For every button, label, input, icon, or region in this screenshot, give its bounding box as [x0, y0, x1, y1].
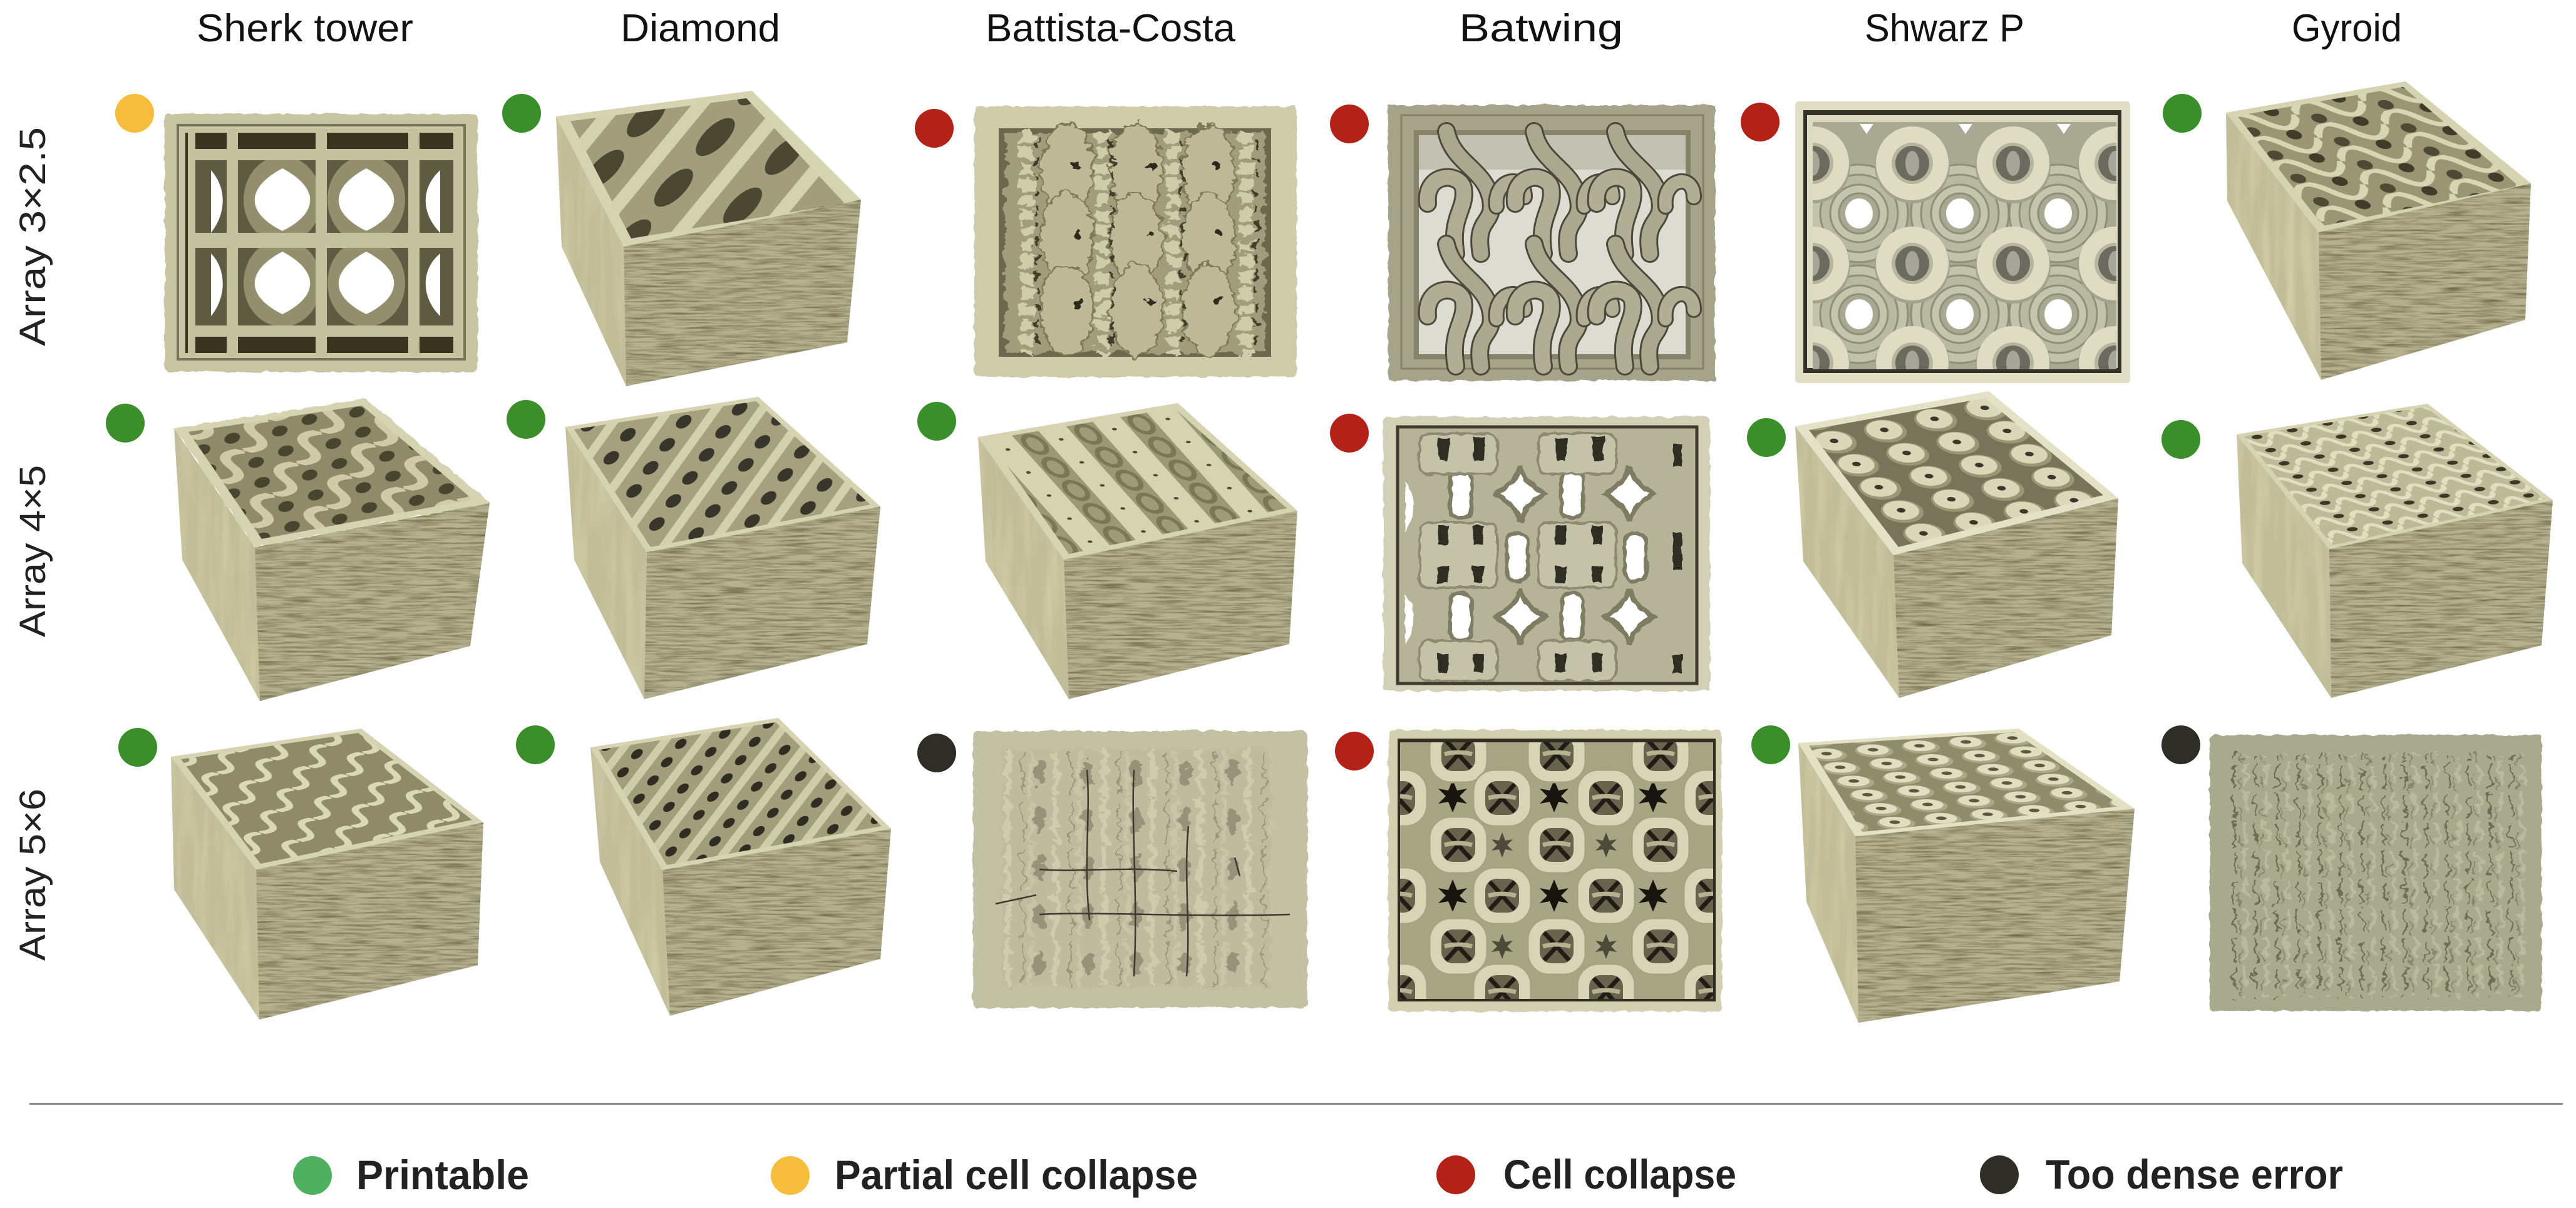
top face [2226, 81, 2531, 232]
sample: Batwing 4×5 [1383, 417, 1710, 691]
sample: Battista-Costa 3×2.5 [974, 106, 1297, 377]
status dot: Sherk tower 3×2.5, partial collapse [115, 94, 154, 133]
status dot: Sherk tower 4×5, printable [106, 404, 145, 443]
sample: Shwarz P 5×6 [1682, 694, 2221, 1023]
sample: Diamond 3×2.5 [556, 91, 861, 386]
right wall [1893, 498, 2118, 698]
sample: Gyroid 5×6 [2210, 735, 2542, 1011]
column heading: Diamond: Diamond [621, 7, 780, 50]
column heading: Shwarz P: Shwarz P [1865, 7, 2024, 50]
left wall [590, 747, 670, 1016]
status dot: Shwarz P 4×5, printable [1747, 418, 1786, 457]
top face [1795, 391, 2118, 555]
legend item: Cell collapse: Cell collapse [1503, 1151, 1736, 1197]
legend item: Printable: Printable [356, 1152, 529, 1198]
right wall [255, 503, 490, 701]
sample: Shwarz P 3×2.5 [1795, 101, 2130, 383]
right wall [256, 822, 483, 1020]
left wall [565, 427, 647, 699]
status dot: Battista-Costa 4×5, printable [917, 402, 956, 441]
left wall [556, 116, 626, 386]
status dot: Shwarz P 3×2.5, cell collapse [1741, 103, 1780, 141]
status dot: Batwing 5×6, cell collapse [1335, 732, 1374, 770]
status dot: Gyroid 4×5, printable [2161, 420, 2200, 459]
row label: Array 3×2.5: Array 3×2.5 [13, 127, 53, 346]
status dot: Diamond 4×5, printable [507, 400, 545, 439]
column heading: Sherk tower: Sherk tower [197, 7, 413, 50]
sample: Shwarz P 4×5 [1795, 391, 2118, 698]
legend item: Too dense error: Too dense error [2046, 1151, 2343, 1197]
sample: Sherk tower 5×6 [68, 682, 568, 1020]
status dot: Sherk tower 5×6, printable [118, 728, 157, 767]
top face [556, 91, 861, 247]
sample: Batwing 3×2.5 [1388, 105, 1715, 381]
left wall [1795, 426, 1899, 698]
status dot: Gyroid 5×6, too dense [2161, 725, 2200, 764]
status dot: Shwarz P 5×6, printable [1751, 725, 1790, 764]
top face [171, 729, 483, 869]
top face [1798, 729, 2135, 836]
status dot: Batwing 4×5, cell collapse [1330, 414, 1369, 453]
row label: Array 4×5: Array 4×5 [13, 465, 53, 637]
sample: Batwing 5×6 [1369, 726, 1741, 1020]
sample: Sherk tower 3×2.5 [165, 114, 478, 372]
sample: Sherk tower 4×5 [174, 398, 490, 701]
right wall [2329, 500, 2553, 698]
top face [2237, 404, 2553, 549]
right wall [662, 829, 891, 1016]
sample: Gyroid 3×2.5 [2226, 81, 2531, 380]
column heading: Battista-Costa: Battista-Costa [986, 7, 1236, 50]
top face [590, 718, 891, 870]
right wall [624, 200, 861, 386]
sample: Battista-Costa 5×6 [973, 731, 1307, 1008]
legend divider [29, 1103, 2563, 1105]
row label: Array 5×6: Array 5×6 [13, 789, 53, 961]
sample: Diamond 5×6 [490, 670, 971, 1016]
left wall [171, 757, 259, 1020]
legend [293, 1151, 2343, 1198]
column heading: Batwing: Batwing [1459, 7, 1623, 50]
legend item: Partial cell collapse: Partial cell collapse [835, 1152, 1198, 1198]
sample: Battista-Costa 4×5 [978, 403, 1297, 699]
right wall [1855, 809, 2135, 1023]
sample: Gyroid 4×5 [2237, 404, 2553, 698]
status dot: Gyroid 3×2.5, printable [2163, 94, 2202, 133]
right wall [2319, 183, 2531, 380]
left wall [174, 428, 260, 701]
top face [978, 403, 1297, 560]
right wall [644, 506, 880, 699]
left wall [1798, 743, 1858, 1023]
status dot: Diamond 3×2.5, printable [502, 94, 541, 133]
status dot: Battista-Costa 5×6, too dense [917, 734, 956, 772]
status dot: Battista-Costa 3×2.5, cell collapse [915, 109, 954, 148]
right wall [1064, 511, 1297, 699]
top face [174, 399, 490, 547]
status dot: Batwing 3×2.5, cell collapse [1330, 105, 1369, 143]
top face [565, 397, 880, 552]
sample: Diamond 4×5 [565, 397, 880, 699]
left wall [2226, 113, 2321, 380]
status dot: Diamond 5×6, printable [516, 725, 555, 764]
column heading: Gyroid: Gyroid [2292, 7, 2402, 50]
left wall [2237, 434, 2331, 698]
left wall [978, 437, 1069, 699]
